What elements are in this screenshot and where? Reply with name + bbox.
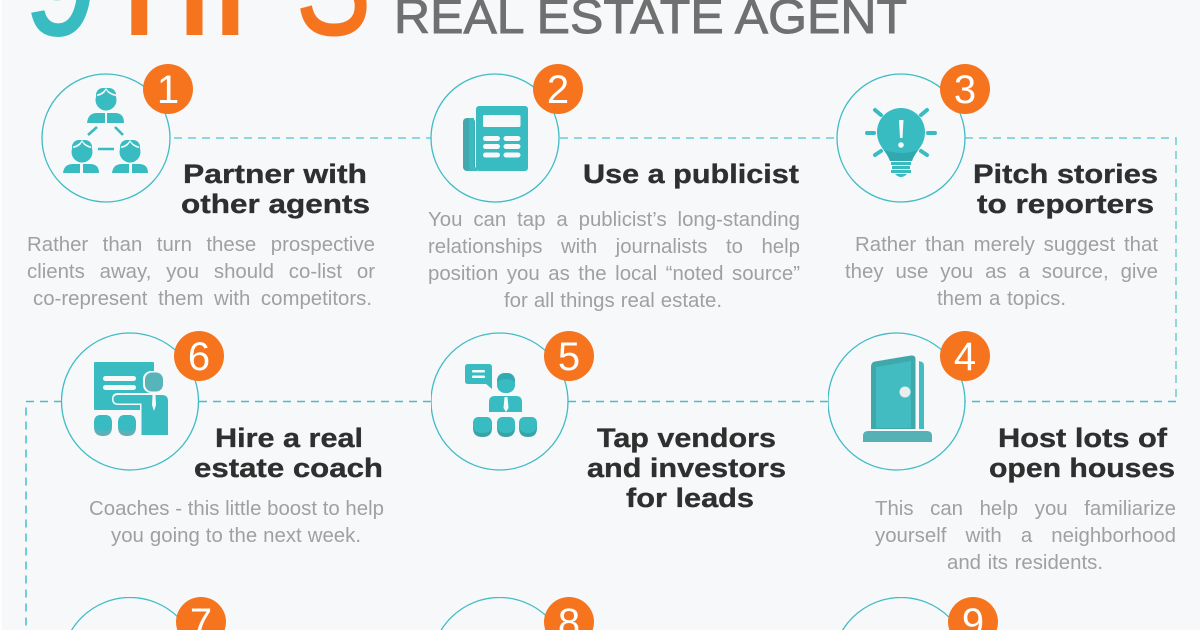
badge 2 [533,64,583,114]
title word TIPS [94,0,371,67]
body text 4: and its residents. [947,552,1103,574]
body text 3: Rather than merely suggest that [855,234,1158,256]
body text 3: they use you as a source, give [845,260,1158,282]
heading 3: Pitch stories [973,159,1158,189]
badge 4 [940,331,990,381]
badge 6 [174,331,224,381]
badge 7 [176,597,226,630]
icon: speaker with audience [465,364,537,437]
badge 6: 6 [188,335,210,379]
heading 1: other agents [181,189,370,219]
body text 1: Rather than turn these prospective [27,234,375,256]
icon ring 9 [832,598,970,630]
panel: tip 8 partially visible [440,597,594,630]
icon ring 3 [837,74,965,202]
icon ring 8 [431,598,568,630]
body text 2: relationships with journalists to help [428,236,800,258]
panel: tip 2 use a publicist [428,64,800,312]
panel: tip 1 partner with other agents [27,64,375,310]
icon ring 4 [828,333,965,470]
heading 4: open houses [989,453,1175,483]
body text 2: You can tap a publicist’s long-standing [428,208,800,230]
panel: tip 9 partially visible [842,597,998,630]
badge 5: 5 [558,335,580,379]
icon: coach at board [94,362,169,436]
body text 3 [845,234,1158,310]
heading 3: to reporters [977,189,1154,219]
body text 1: clients away, you should co-list or [27,260,375,282]
icon ring 2 [431,74,559,202]
icon ring 7 [62,598,198,630]
heading 1: Partner with [183,159,367,189]
panel: tip 5 tap vendors and investors [431,331,786,513]
body text 1 [27,234,375,310]
body text 6 [89,498,384,546]
heading 5 [587,423,786,513]
body text 4: yourself with a neighborhood [875,524,1176,546]
body text 6: Coaches - this little boost to help [89,498,384,520]
heading 4: Host lots of [998,423,1168,453]
badge 1 [143,64,193,114]
icon: open door [863,355,932,442]
heading 3 [973,159,1158,219]
panel: tip 4 host lots of open houses [828,331,1176,574]
title [25,0,907,40]
badge 8 [544,597,594,630]
badge 2: 2 [547,68,569,112]
heading 6: estate coach [194,453,383,483]
icon ring 1 [42,74,170,202]
icon ring 5 [431,333,568,470]
body text 3: them a topics. [937,288,1066,310]
panel: tip 7 partially visible [71,597,226,630]
badge 5 [544,331,594,381]
heading 4 [989,423,1175,483]
panel: tip 3 pitch stories to reporters [836,64,1158,310]
icon: newspaper [463,106,528,171]
body text 2: position you as the local “noted source” [428,262,800,284]
body text 6: you going to the next week. [111,524,361,546]
heading 5: and investors [587,453,786,483]
badge 3: 3 [954,68,976,112]
heading 2: Use a publicist [583,159,799,189]
icon: three connected people [63,88,148,173]
icon ring 6 [62,333,198,470]
heading 6: Hire a real [215,423,363,453]
badge 4: 4 [954,335,976,379]
body text 2 [428,208,800,312]
heading 1 [181,159,370,219]
body text 1: co-represent them with competitors. [33,288,372,310]
badge 1: 1 [157,68,179,112]
badge 3 [940,64,990,114]
heading 5: Tap vendors [597,423,776,453]
heading 6 [194,423,383,483]
body text 2: for all things real estate. [504,290,722,312]
body text 4: This can help you familiarize [875,498,1176,520]
heading 5: for leads [626,483,754,513]
body text 4 [875,498,1176,574]
panel: tip 6 hire a real estate coach [61,331,384,546]
icon: light bulb [867,108,935,177]
badge 9 [948,597,998,630]
